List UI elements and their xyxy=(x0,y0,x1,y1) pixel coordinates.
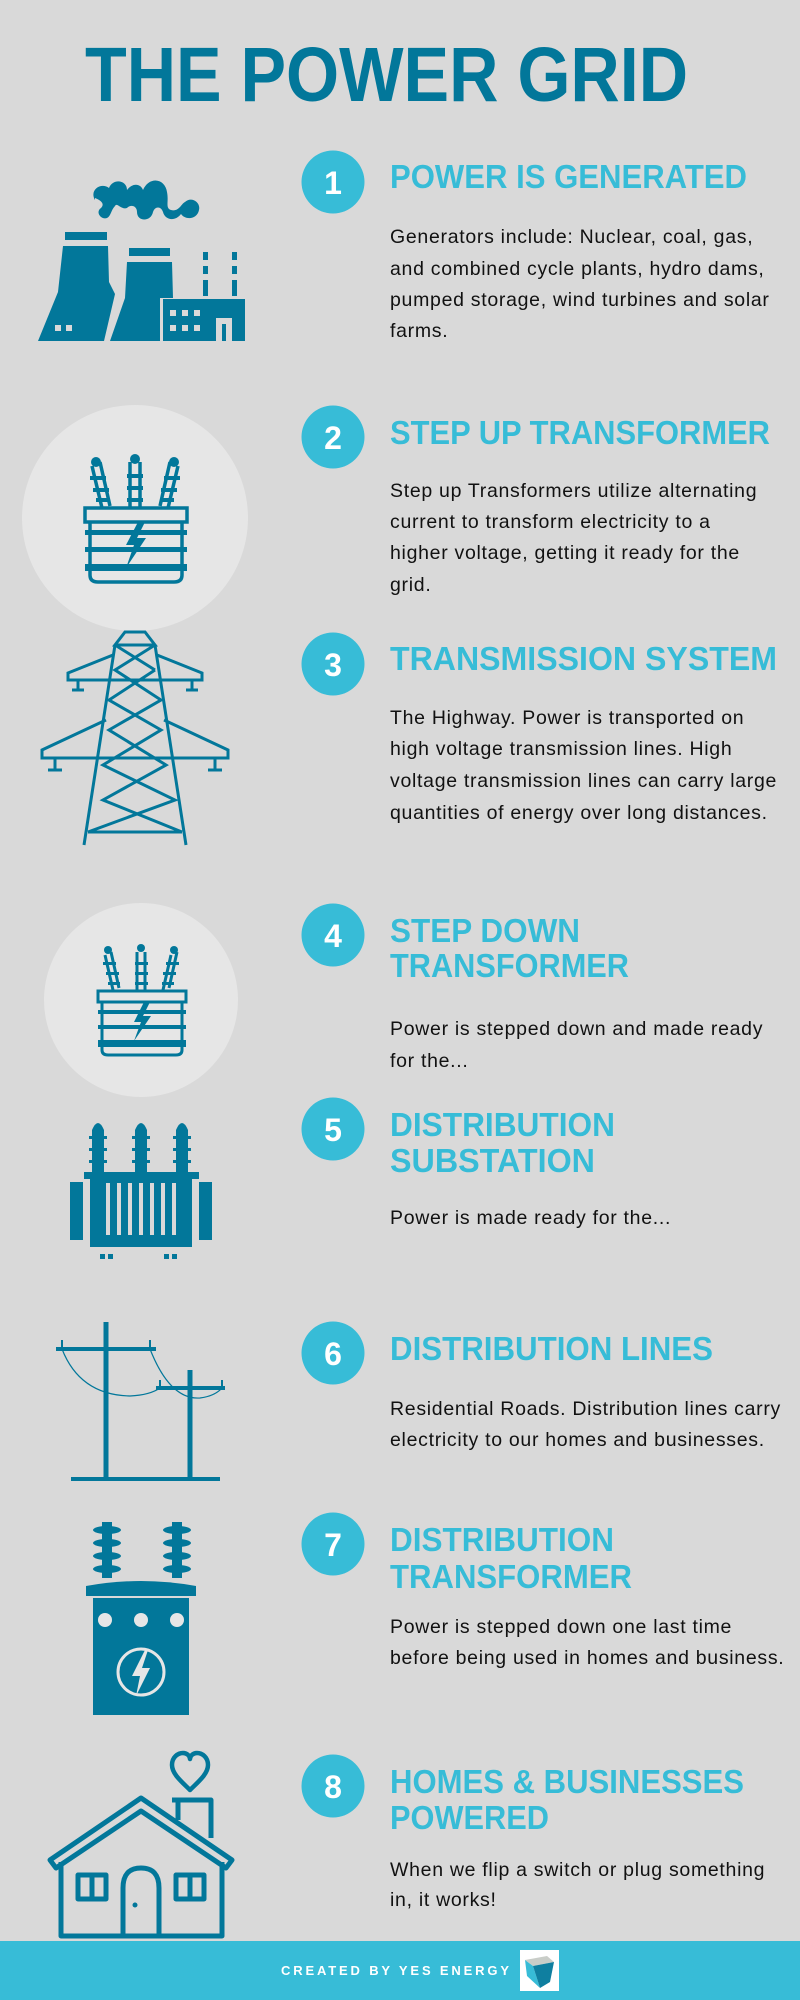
step 8: POWERED xyxy=(390,1799,549,1836)
step 3 xyxy=(302,632,777,824)
step 5: DISTRIBUTION xyxy=(390,1106,615,1143)
step 5: SUBSTATION xyxy=(390,1142,595,1179)
icon: distribution substation xyxy=(70,1123,212,1259)
icon: house xyxy=(50,1753,232,1936)
step 8: 8 xyxy=(324,1769,342,1805)
step 1: pumped storage, wind turbines and solar xyxy=(390,289,770,311)
step 3: 3 xyxy=(324,647,342,683)
step 4 xyxy=(302,904,763,1072)
step 2: STEP UP TRANSFORMER xyxy=(390,414,770,451)
icon: step up transformer xyxy=(22,405,248,631)
step 4: 4 xyxy=(324,918,342,954)
icon: transmission pylon xyxy=(42,632,228,845)
step 6: 6 xyxy=(324,1336,342,1372)
step 3: The Highway. Power is transported on xyxy=(390,707,744,729)
icon: distribution lines xyxy=(56,1322,225,1479)
title: THE POWER GRID xyxy=(85,32,688,118)
step 1: 1 xyxy=(324,165,342,201)
icon: step down transformer xyxy=(44,903,238,1097)
step 5: Power is made ready for the... xyxy=(390,1207,671,1229)
footer: CREATED BY YES ENERGY xyxy=(281,1963,509,1978)
step 4: STEP DOWN xyxy=(390,912,580,949)
icon: distribution transformer xyxy=(86,1522,196,1715)
step 6 xyxy=(302,1322,781,1451)
step 2: 2 xyxy=(324,420,342,456)
step 8: When we flip a switch or plug something xyxy=(390,1859,765,1881)
step 4: TRANSFORMER xyxy=(390,947,629,984)
step 1 xyxy=(302,150,770,342)
step 8: HOMES & BUSINESSES xyxy=(390,1763,744,1800)
icon: power plant xyxy=(38,180,245,341)
step 3: quantities of energy over long distances. xyxy=(390,802,768,824)
step 1: and combined cycle plants, hydro dams, xyxy=(390,258,765,280)
step 3: voltage transmission lines can carry large xyxy=(390,770,777,792)
step 5 xyxy=(302,1098,671,1229)
step 7: 7 xyxy=(324,1527,342,1563)
step 2: grid. xyxy=(390,574,431,596)
step 1: POWER IS GENERATED xyxy=(390,158,747,195)
step 7 xyxy=(302,1512,784,1669)
logo xyxy=(520,1950,559,1991)
step 6: Residential Roads. Distribution lines carry xyxy=(390,1398,781,1420)
step 8: in, it works! xyxy=(390,1889,497,1911)
step 7: TRANSFORMER xyxy=(390,1558,632,1595)
step 2: higher voltage, getting it ready for the xyxy=(390,542,740,564)
step 6: electricity to our homes and businesses. xyxy=(390,1429,765,1451)
step 4: for the... xyxy=(390,1050,469,1072)
step 2: current to transform electricity to a xyxy=(390,511,711,533)
step 4: Power is stepped down and made ready xyxy=(390,1018,763,1040)
step 7: DISTRIBUTION xyxy=(390,1521,614,1558)
footer xyxy=(0,1941,800,2000)
step 3: TRANSMISSION SYSTEM xyxy=(390,640,777,677)
step 8 xyxy=(302,1754,765,1911)
step 6: DISTRIBUTION LINES xyxy=(390,1330,713,1367)
step 5: 5 xyxy=(324,1112,342,1148)
step 7: before being used in homes and business. xyxy=(390,1647,784,1669)
step 3: high voltage transmission lines. High xyxy=(390,738,732,760)
step 7: Power is stepped down one last time xyxy=(390,1616,732,1638)
step 1: farms. xyxy=(390,320,448,342)
step 2: Step up Transformers utilize alternating xyxy=(390,480,757,502)
step 2 xyxy=(302,406,770,596)
step 1: Generators include: Nuclear, coal, gas, xyxy=(390,226,753,248)
